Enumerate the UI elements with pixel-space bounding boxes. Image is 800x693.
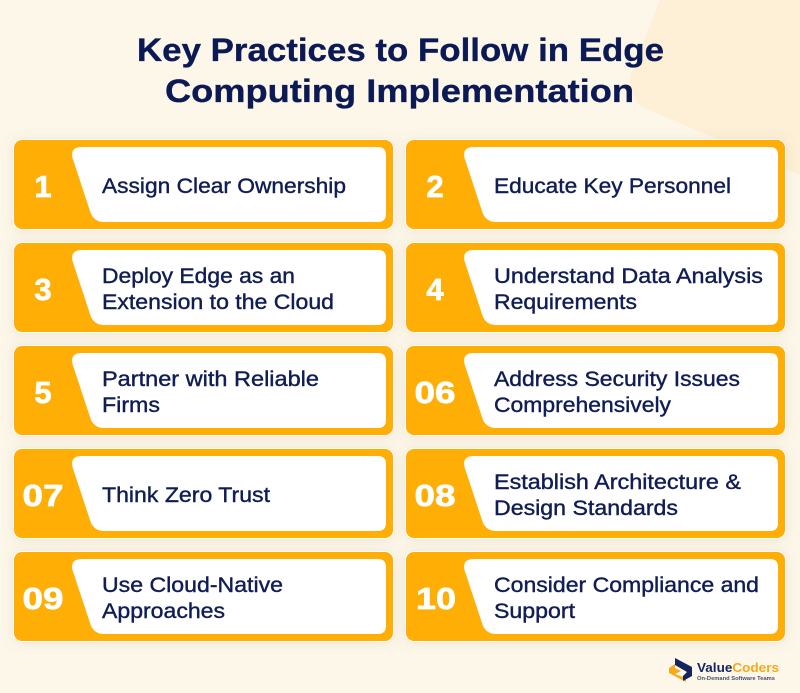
- label: Use Cloud-Native: [102, 574, 283, 597]
- label: [102, 265, 334, 314]
- label: [102, 574, 283, 623]
- label: Think Zero Trust: [102, 484, 270, 507]
- label: Requirements: [494, 291, 637, 314]
- label: Consider Compliance and: [494, 574, 759, 597]
- label: Partner with Reliable: [102, 368, 319, 391]
- card 1: Assign Clear Ownership: [13, 139, 394, 230]
- label: Firms: [102, 394, 160, 417]
- card 2: Educate Key Personnel: [405, 139, 786, 230]
- label: [102, 368, 319, 417]
- label: Design Standards: [494, 497, 678, 520]
- number 08: 08: [414, 478, 456, 513]
- card 8: Establish Architecture & Design Standards: [405, 448, 786, 539]
- number 5: 5: [34, 375, 52, 410]
- title: Computing Implementation: [165, 73, 634, 109]
- label: [494, 265, 763, 314]
- logo: ValueCoders: [669, 658, 779, 682]
- number 4: 4: [426, 272, 444, 307]
- number 3: 3: [34, 272, 52, 307]
- label: Establish Architecture &: [494, 471, 741, 494]
- label: Approaches: [102, 600, 225, 623]
- label: Educate Key Personnel: [494, 175, 731, 198]
- label: Assign Clear Ownership: [102, 175, 346, 198]
- label: Deploy Edge as an: [102, 265, 295, 288]
- label: Extension to the Cloud: [102, 291, 334, 314]
- label: Understand Data Analysis: [494, 265, 763, 288]
- card 5: Partner with Reliable Firms: [13, 345, 394, 436]
- card 9: Use Cloud-Native Approaches: [13, 551, 394, 642]
- background accent shape: [630, 0, 800, 175]
- number 06: 06: [414, 375, 456, 410]
- card 6: Address Security Issues Comprehensively: [405, 345, 786, 436]
- card 10: Consider Compliance and Support: [405, 551, 786, 642]
- wordmark: ValueCoders: [697, 660, 779, 675]
- number 2: 2: [426, 169, 444, 204]
- label: Comprehensively: [494, 394, 672, 417]
- label: [494, 574, 759, 623]
- icon: logo mark: [669, 658, 692, 682]
- label: [494, 368, 740, 417]
- title: Key Practices to Follow in Edge: [137, 32, 664, 68]
- card 7: Think Zero Trust: [13, 448, 394, 539]
- label: Address Security Issues: [494, 368, 740, 391]
- number 07: 07: [22, 478, 64, 513]
- title: [137, 32, 664, 109]
- number 10: 10: [416, 581, 456, 616]
- label: [494, 471, 741, 520]
- number 09: 09: [22, 581, 64, 616]
- label: Support: [494, 600, 575, 623]
- tagline: On-Demand Software Teams: [697, 676, 775, 682]
- card 4: Understand Data Analysis Requirements: [405, 242, 786, 333]
- number 1: 1: [34, 169, 52, 204]
- card 3: Deploy Edge as an Extension to the Cloud: [13, 242, 394, 333]
